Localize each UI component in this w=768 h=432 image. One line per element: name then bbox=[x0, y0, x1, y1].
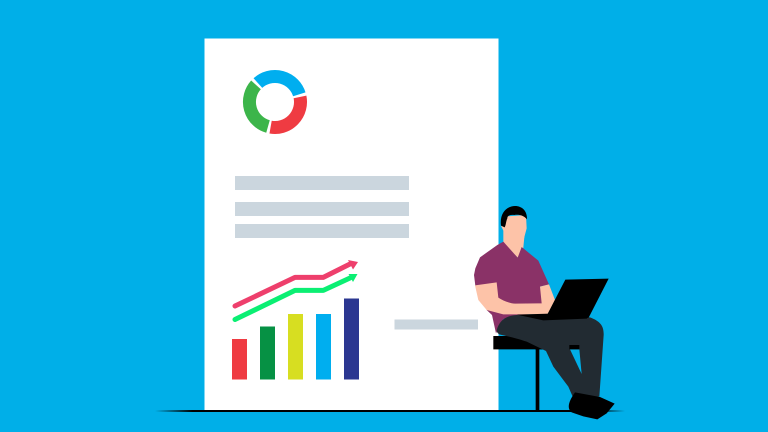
bar: yellow bbox=[288, 314, 303, 380]
bar: blue bbox=[316, 314, 331, 380]
chair bbox=[493, 336, 555, 412]
hair bbox=[501, 206, 527, 227]
neck bbox=[503, 230, 525, 258]
face bbox=[501, 215, 527, 244]
donut segment: green bbox=[249, 85, 268, 126]
line 1 bbox=[235, 176, 409, 190]
donut chart bbox=[249, 76, 301, 127]
trend arrow: pink bbox=[235, 260, 358, 306]
side line bbox=[394, 320, 478, 330]
arm bbox=[475, 282, 555, 314]
bar: navy bbox=[344, 298, 359, 380]
chair rail behind knee bbox=[569, 345, 579, 349]
donut segment: red bbox=[271, 97, 301, 127]
shirt bbox=[474, 242, 549, 333]
trousers bbox=[497, 315, 604, 397]
person on chair with laptop bbox=[474, 206, 615, 419]
laptop bbox=[517, 279, 609, 320]
trend arrow: green bbox=[235, 274, 358, 320]
line 3 bbox=[235, 224, 409, 238]
donut segment: blue bbox=[258, 76, 299, 94]
gap between legs bbox=[570, 349, 582, 374]
document page bbox=[204, 38, 498, 410]
ground line bbox=[155, 410, 625, 412]
bar chart bbox=[232, 298, 359, 380]
bar: green bbox=[260, 326, 275, 380]
shoes bbox=[569, 392, 615, 419]
bar: red bbox=[232, 339, 247, 380]
text placeholder lines bbox=[235, 176, 478, 330]
line 2 bbox=[235, 202, 409, 216]
